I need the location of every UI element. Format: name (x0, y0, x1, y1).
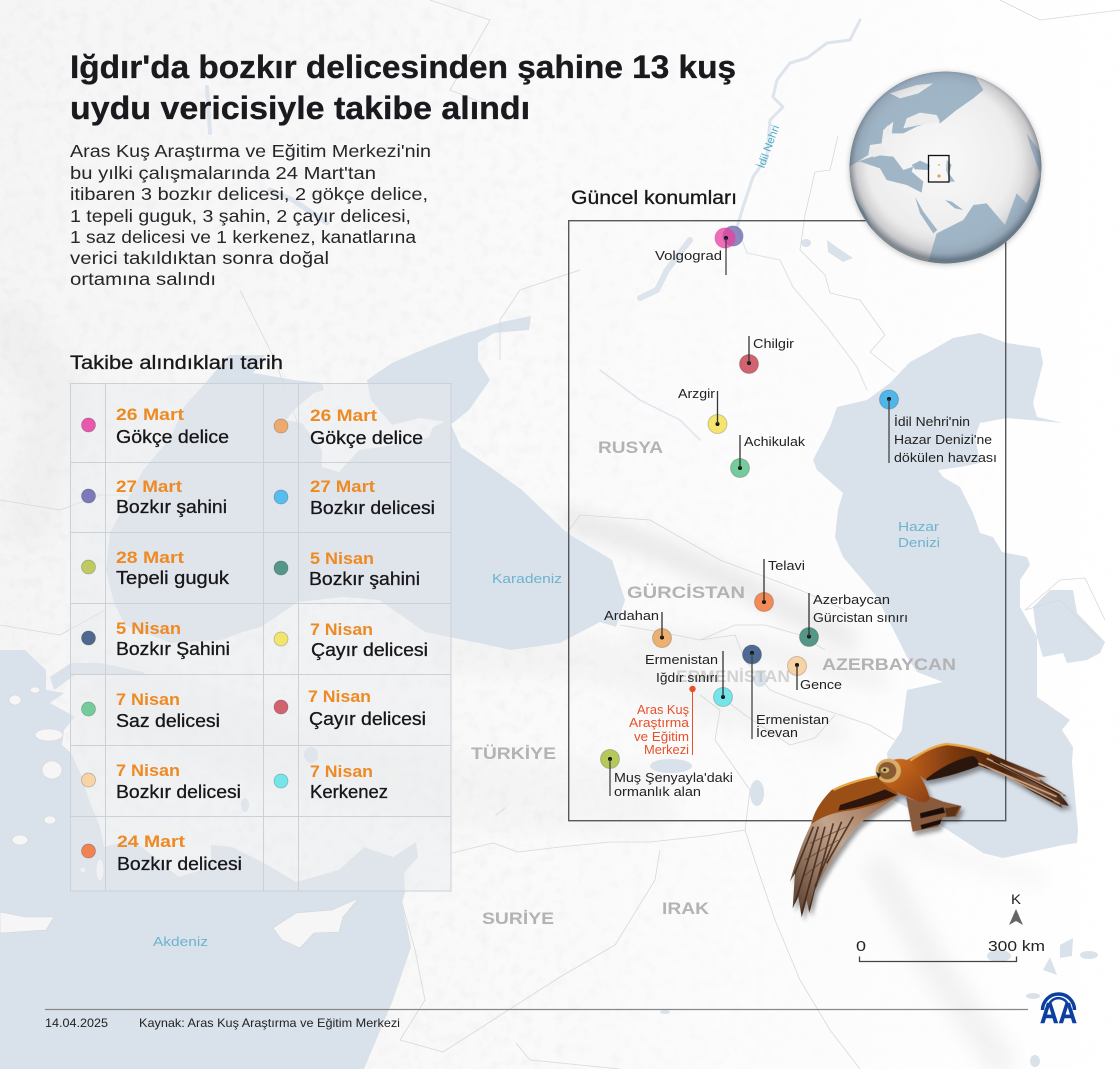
bird tail (906, 797, 962, 832)
title: Iğdır'da bozkır delicesinden şahine 13 kuş (70, 49, 736, 85)
marker: Gence: Gence (800, 677, 842, 692)
map heading: Güncel konumları (571, 188, 737, 209)
marker: Icevan: Ermenistan (756, 712, 829, 727)
title: uydu vericisiyle takibe alındı (70, 90, 530, 126)
scale bar: 300 km (988, 938, 1045, 955)
marker: Mus: ormanlık alan (614, 784, 701, 799)
legend entries: Tepeli guguk (116, 568, 230, 588)
legend heading: Takibe alındıkları tarih (70, 353, 283, 374)
north arrow (1009, 891, 1023, 925)
marker: bird research centre (629, 686, 696, 757)
Kara-Bogaz (1033, 590, 1105, 663)
legend entries: 7 Nisan (310, 762, 373, 781)
islands (0, 687, 359, 948)
panel: location markers (600, 226, 997, 799)
footer date: 14.04.2025 (45, 1016, 108, 1030)
country labels (471, 438, 956, 928)
intro text block: itibaren 3 bozkır delicesi, 2 gökçe delice, (70, 184, 428, 204)
footer source: Kaynak: Aras Kuş Araştırma ve Eğitim Merkezi (139, 1016, 400, 1030)
lakes (650, 759, 692, 773)
panel: legend table (70, 383, 451, 891)
legend entries: 7 Nisan (116, 761, 180, 780)
marker: Azerbaijan-Georgia border: Azerbaycan (813, 592, 890, 607)
marker: Mus (600, 750, 733, 799)
marker: Arzgir: Arzgir (678, 386, 716, 401)
marker: Azerbaijan-Georgia border: Gürcistan sınırı (813, 610, 908, 625)
marker: Achikulak (730, 434, 806, 478)
country labels: ERMENİSTAN (676, 667, 790, 686)
scale bar (856, 938, 1045, 962)
legend entries: Bozkır Şahini (116, 639, 230, 659)
marker: Volgograd (655, 226, 743, 275)
legend entries: 26 Mart (310, 406, 377, 425)
marker: Volga delta: dökülen havzası (894, 450, 997, 465)
country labels: AZERBAYCAN (822, 655, 956, 674)
marker: Volgograd: Volgograd (655, 248, 722, 263)
intro text block: Aras Kuş Araştırma ve Eğitim Merkezi'nin (70, 141, 431, 161)
legend entries: 26 Mart (116, 405, 184, 424)
marker: Armenia-Igdir border (645, 651, 732, 706)
legend entries: Bozkır delicesi (117, 854, 242, 874)
bird head (876, 759, 901, 783)
Crete (0, 912, 54, 933)
marker: Mus: Muş Şenyayla'daki (614, 770, 733, 785)
title (70, 49, 736, 126)
intro text block: 1 tepeli guguk, 3 şahin, 2 çayır delicesi, (70, 206, 411, 226)
legend entries: Gökçe delice (116, 427, 229, 447)
marker: Icevan (742, 645, 829, 740)
legend entries: 28 Mart (116, 548, 184, 567)
legend entries: Saz delicesi (116, 711, 220, 731)
legend table background (70, 383, 451, 891)
bird right wing (907, 743, 1069, 808)
Black Sea (106, 355, 625, 650)
legend entries: 27 Mart (310, 477, 375, 496)
legend entries: Bozkır delicesi (310, 498, 435, 518)
marker: Armenia-Igdir border: Iğdır sınırı (656, 670, 718, 685)
water bodies (0, 239, 1105, 1069)
marker: Icevan: İcevan (756, 725, 798, 740)
Mediterranean and Aegean (0, 650, 418, 1069)
intro text block (70, 141, 431, 289)
scale bar: 0 (856, 938, 866, 955)
legend entries (116, 405, 435, 874)
legend entries: Kerkenez (310, 782, 388, 802)
marker: Volga delta: İdil Nehri'nin (894, 414, 970, 429)
water labels: Denizi (898, 535, 940, 550)
intro text block: bu yılki çalışmalarında 24 Mart'tan (70, 163, 376, 183)
north arrow: K (1011, 891, 1022, 907)
legend entries: 27 Mart (116, 477, 182, 496)
bird left wing (790, 775, 898, 917)
marker: Telavi (754, 558, 805, 612)
legend entries: Bozkır delicesi (116, 782, 241, 802)
legend entries: Bozkır şahini (309, 569, 420, 589)
marker: Ardahan: Ardahan (604, 608, 659, 623)
water labels (153, 123, 940, 949)
logo: AA: AA (1040, 998, 1077, 1030)
water labels: İdil Nehri (755, 123, 782, 170)
intro text block: ortamına salındı (70, 269, 216, 289)
legend entries: 7 Nisan (308, 687, 371, 706)
water labels: Hazar (898, 519, 940, 534)
marker: Chilgir: Chilgir (753, 336, 795, 351)
marker: bird research centre: Aras Kuş (637, 703, 689, 717)
marker: Chilgir (740, 336, 795, 374)
legend dots (82, 418, 288, 858)
marker: Achikulak: Achikulak (744, 434, 806, 449)
bird illustration (790, 743, 1069, 917)
marker: Ardahan (604, 608, 672, 648)
bird body (880, 759, 930, 802)
legend entries: 7 Nisan (116, 690, 180, 709)
intro text block: verici takıldıktan sonra doğal (70, 248, 329, 268)
legend entries: 24 Mart (117, 832, 185, 851)
legend entries: 5 Nisan (116, 619, 181, 638)
marker: Telavi: Telavi (768, 558, 805, 573)
legend entries: Çayır delicesi (311, 640, 428, 660)
marker: Gence (788, 656, 842, 692)
water labels: Akdeniz (153, 934, 208, 949)
country labels: IRAK (662, 899, 710, 918)
intro text block: 1 saz delicesi ve 1 kerkenez, kanatlarına (70, 227, 416, 247)
legend grid (70, 383, 451, 891)
Sea of Azov (367, 316, 531, 425)
legend entries: Bozkır şahini (116, 497, 227, 517)
legend entries: Çayır delicesi (309, 709, 426, 729)
globe locator box (928, 156, 949, 182)
marker: Volga delta (880, 390, 997, 465)
terrain shading (10, 330, 1040, 1060)
marker: Azerbaijan-Georgia border (800, 592, 908, 646)
country labels: SURİYE (482, 909, 554, 928)
marker: Arzgir (678, 386, 727, 434)
marker: Volga delta: Hazar Denizi'ne (894, 432, 992, 447)
rivers and reservoirs (207, 20, 867, 815)
Cyprus (273, 898, 359, 948)
marker: Armenia-Igdir border: Ermenistan (645, 652, 718, 667)
legend entries: 5 Nisan (310, 549, 374, 568)
marker: bird research centre: ve Eğitim (634, 730, 689, 744)
inset frame (569, 221, 1006, 821)
globe (843, 67, 1043, 270)
footer rule (45, 1008, 1028, 1010)
Caspian Sea (813, 333, 1078, 858)
country labels: TÜRKİYE (471, 744, 556, 763)
marker: bird research centre: Merkezi (644, 743, 689, 757)
legend entries: Gökçe delice (310, 428, 423, 448)
legend entries: 7 Nisan (310, 620, 373, 639)
marker: bird research centre: Araştırma (629, 716, 689, 730)
Marmara (50, 663, 146, 690)
water labels: Karadeniz (492, 571, 562, 586)
country labels: RUSYA (598, 438, 663, 457)
country labels: GÜRCİSTAN (627, 583, 745, 602)
